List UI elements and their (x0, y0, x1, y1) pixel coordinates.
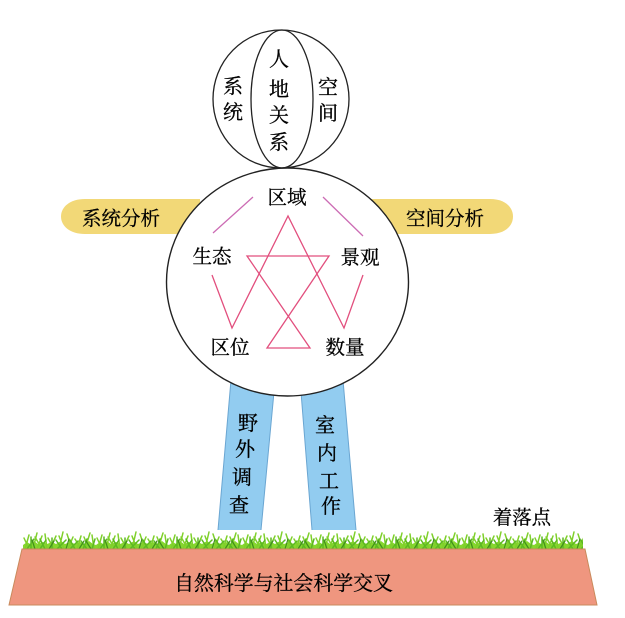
head centre label: 系 (269, 131, 289, 154)
left leg: 野外调查: 外 (235, 438, 256, 461)
head left label (223, 75, 243, 124)
label: 景观: 景观 (340, 247, 380, 269)
right leg: 室内工作: 内 (317, 442, 337, 465)
pentagon and star lines (212, 197, 363, 348)
label: 着落点: 着落点 (493, 507, 552, 529)
left arm: 系统分析 (61, 199, 200, 234)
right arm: 空间分析 (370, 199, 513, 234)
left leg: 野外调查: 野 (238, 413, 258, 435)
right leg: 室内工作: 室 (315, 414, 335, 437)
grass strip (23, 530, 583, 550)
right leg: 室内工作 (301, 380, 356, 530)
left leg: 野外调查 (218, 380, 274, 530)
label: 区位: 区位 (210, 337, 250, 359)
left arm: 系统分析: 系统分析 (82, 208, 160, 230)
head: 人地关系 sphere (213, 30, 349, 168)
head left label: 统 (223, 101, 243, 124)
head right label: 间 (318, 102, 338, 125)
label: 区域: 区域 (267, 187, 307, 209)
body circle (166, 168, 408, 396)
ground base: 自然科学与社会科学交叉 (174, 572, 393, 595)
left leg: 野外调查: 调 (232, 466, 252, 489)
right arm: 空间分析: 空间分析 (406, 208, 484, 230)
left leg: 野外调查: 查 (229, 494, 249, 517)
head left label: 系 (223, 75, 243, 98)
head centre label: 人 (269, 48, 289, 71)
ground base (9, 549, 597, 605)
head right label (318, 76, 338, 125)
label: 数量: 数量 (325, 337, 365, 359)
head centre label: 地 (269, 78, 289, 101)
head centre label: 关 (269, 104, 289, 127)
head centre label (269, 48, 289, 154)
right leg: 室内工作: 作 (321, 495, 341, 518)
head right label: 空 (318, 76, 338, 99)
label: 生态: 生态 (192, 246, 232, 268)
right leg: 室内工作: 工 (319, 471, 339, 493)
